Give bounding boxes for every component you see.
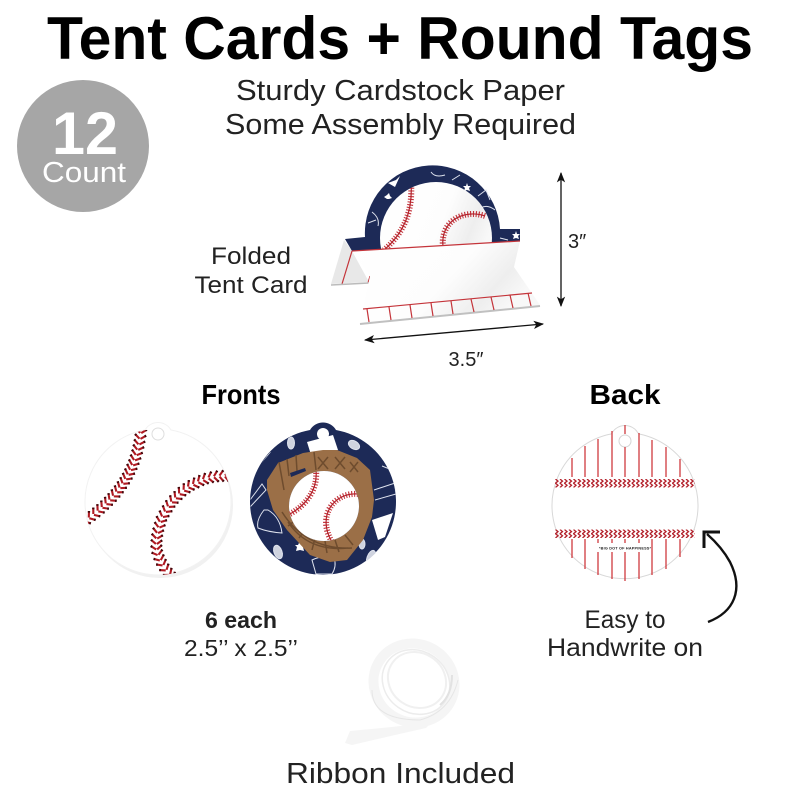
folded tent card label: Folded	[211, 243, 291, 270]
ribbon caption: Ribbon Included	[286, 758, 515, 790]
ribbon	[345, 629, 469, 745]
folded tent card label: Tent Card	[194, 272, 308, 299]
folded tent card label	[194, 243, 308, 299]
baseball on arch	[380, 182, 492, 249]
subtitle: Some Assembly Required	[225, 109, 576, 141]
front tag: baseball	[85, 422, 233, 578]
brand line: *BIG DOT OF HAPPINESS*	[599, 546, 652, 550]
back tag	[552, 425, 698, 581]
subtitle	[225, 75, 576, 141]
ball inside glove	[289, 470, 359, 542]
pinstripes	[572, 425, 680, 581]
fronts heading: Fronts	[202, 379, 280, 410]
front panel	[352, 241, 540, 323]
back caption: Easy to	[584, 606, 666, 634]
curved arrow	[707, 534, 736, 622]
badge number: 12	[52, 100, 118, 167]
width arrow	[365, 324, 543, 340]
back caption: Handwrite on	[547, 634, 703, 662]
score lines	[363, 293, 532, 322]
navy arch	[345, 165, 520, 251]
stitch bands	[555, 479, 695, 538]
fronts caption	[184, 607, 298, 661]
height label: 3″	[568, 231, 586, 253]
arrow head	[704, 532, 720, 548]
tent card illustration	[331, 165, 540, 324]
back caption	[547, 606, 703, 662]
doodles	[250, 435, 396, 574]
glove	[267, 450, 374, 562]
back left flap	[331, 240, 369, 284]
badge label: Count	[42, 157, 126, 189]
height arrow	[560, 173, 562, 306]
width label: 3.5″	[449, 349, 483, 371]
fronts caption: 2.5’’ x 2.5’’	[184, 635, 298, 661]
title: Tent Cards + Round Tags	[47, 5, 753, 72]
subtitle: Sturdy Cardstock Paper	[236, 75, 565, 107]
back heading: Back	[590, 379, 661, 410]
fronts caption: 6 each	[205, 607, 277, 633]
front tag: glove	[250, 422, 396, 575]
count badge	[17, 80, 149, 212]
